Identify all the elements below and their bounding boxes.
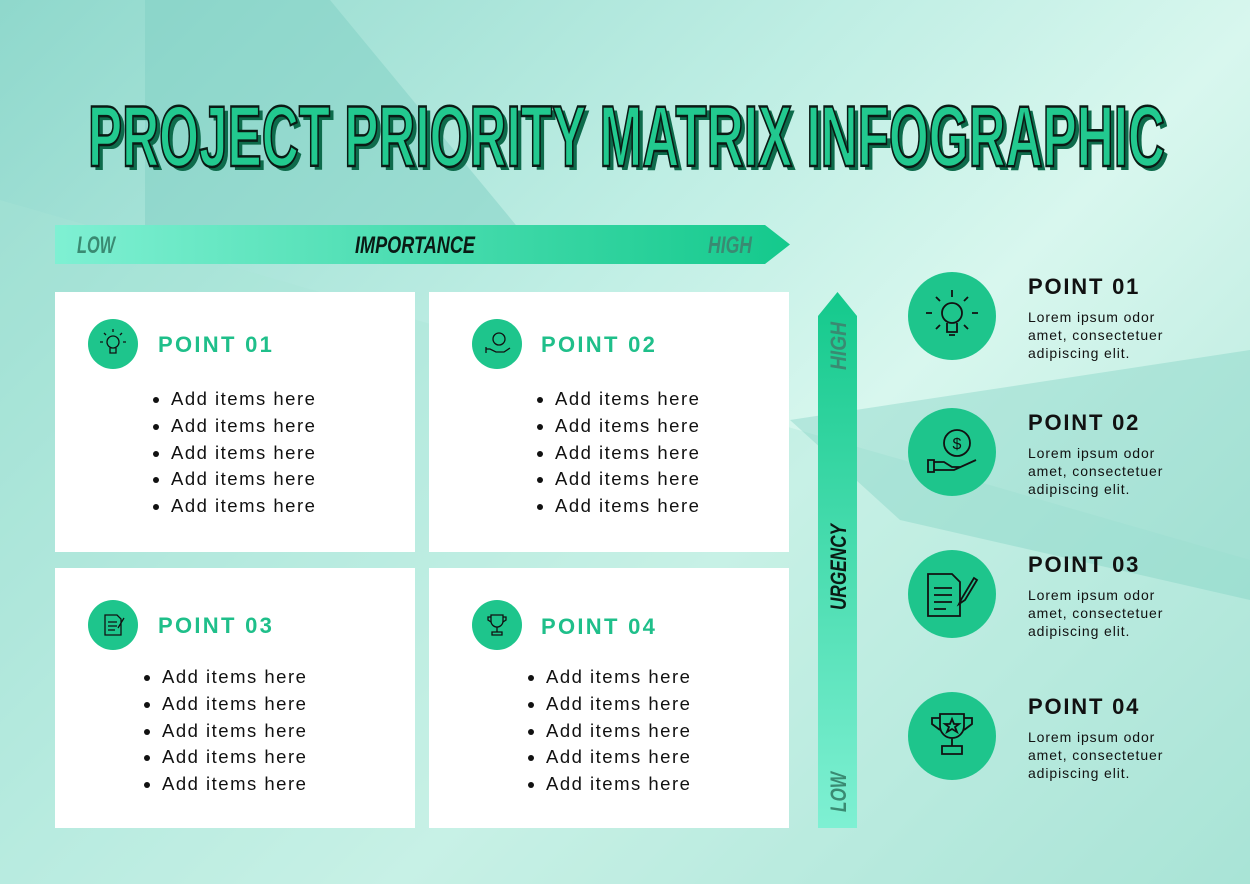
panel: point 01: POINT 01 <box>158 332 274 357</box>
panel: point 01 <box>55 292 415 552</box>
sidebar: point 03: POINT 03 <box>1028 552 1140 577</box>
sidebar: point 04: Lorem ipsum odor <box>1028 729 1155 745</box>
panel: point 02: Add items here <box>555 388 700 409</box>
panel: point 02: Add items here <box>555 415 700 436</box>
sidebar: point 03 <box>908 550 1163 639</box>
panel: point 01: Add items here <box>171 495 316 516</box>
sidebar: point 02: Lorem ipsum odor <box>1028 445 1155 461</box>
arrow: urgency: URGENCY <box>826 522 851 610</box>
panel: point 02: Add items here <box>555 442 700 463</box>
icon: money hand <box>472 319 522 369</box>
panel: point 01: Add items here <box>171 415 316 436</box>
icon: money hand <box>908 408 996 496</box>
icon: bulb <box>88 319 138 369</box>
arrow: importance: HIGH <box>708 232 752 259</box>
arrow: importance: IMPORTANCE <box>355 232 476 259</box>
sidebar: point 02 <box>908 408 1163 497</box>
panel: point 04 <box>429 568 789 828</box>
arrow: urgency <box>818 292 857 828</box>
sidebar: point 01 <box>908 272 1163 361</box>
sidebar: point 01: amet, consectetuer <box>1028 327 1163 343</box>
panel: point 04: Add items here <box>546 720 691 741</box>
panel: point 03: Add items here <box>162 693 307 714</box>
sidebar: point 02: POINT 02 <box>1028 410 1140 435</box>
sidebar: point 02: amet, consectetuer <box>1028 463 1163 479</box>
panel: point 01: Add items here <box>171 388 316 409</box>
panel: point 04: Add items here <box>546 773 691 794</box>
panel: point 02: Add items here <box>555 495 700 516</box>
panel: point 02: Add items here <box>555 468 700 489</box>
panel: point 03: Add items here <box>162 720 307 741</box>
sidebar: point 01: adipiscing elit. <box>1028 345 1130 361</box>
panel: point 04: POINT 04 <box>541 614 657 639</box>
panel: point 04: Add items here <box>546 666 691 687</box>
panel: point 03: Add items here <box>162 746 307 767</box>
panel: point 03 <box>55 568 415 828</box>
icon: money hand: $ <box>953 436 962 453</box>
panel: point 02 <box>429 292 789 552</box>
icon: bulb <box>908 272 996 360</box>
sidebar: point 03: amet, consectetuer <box>1028 605 1163 621</box>
arrow: importance <box>55 225 790 264</box>
icon: document <box>88 600 138 650</box>
panel: point 01: Add items here <box>171 468 316 489</box>
arrow: importance: LOW <box>77 232 117 259</box>
icon: document <box>908 550 996 638</box>
panel: point 01: Add items here <box>171 442 316 463</box>
sidebar: point 02: adipiscing elit. <box>1028 481 1130 497</box>
icon: trophy <box>472 600 522 650</box>
sidebar: point 03: Lorem ipsum odor <box>1028 587 1155 603</box>
sidebar: point 01: Lorem ipsum odor <box>1028 309 1155 325</box>
panel: point 04: Add items here <box>546 693 691 714</box>
sidebar: point 04: adipiscing elit. <box>1028 765 1130 781</box>
panel: point 02: POINT 02 <box>541 332 657 357</box>
sidebar: point 04: amet, consectetuer <box>1028 747 1163 763</box>
sidebar: point 03: adipiscing elit. <box>1028 623 1130 639</box>
panel: point 04: Add items here <box>546 746 691 767</box>
sidebar: point 04: POINT 04 <box>1028 694 1140 719</box>
sidebar: point 04 <box>908 692 1163 781</box>
arrow: urgency: LOW <box>826 770 851 812</box>
sidebar: point 01: POINT 01 <box>1028 274 1140 299</box>
panel: point 03: Add items here <box>162 773 307 794</box>
panel: point 03: Add items here <box>162 666 307 687</box>
panel: point 03: POINT 03 <box>158 613 274 638</box>
icon: trophy <box>908 692 996 780</box>
arrow: urgency: HIGH <box>826 321 851 370</box>
